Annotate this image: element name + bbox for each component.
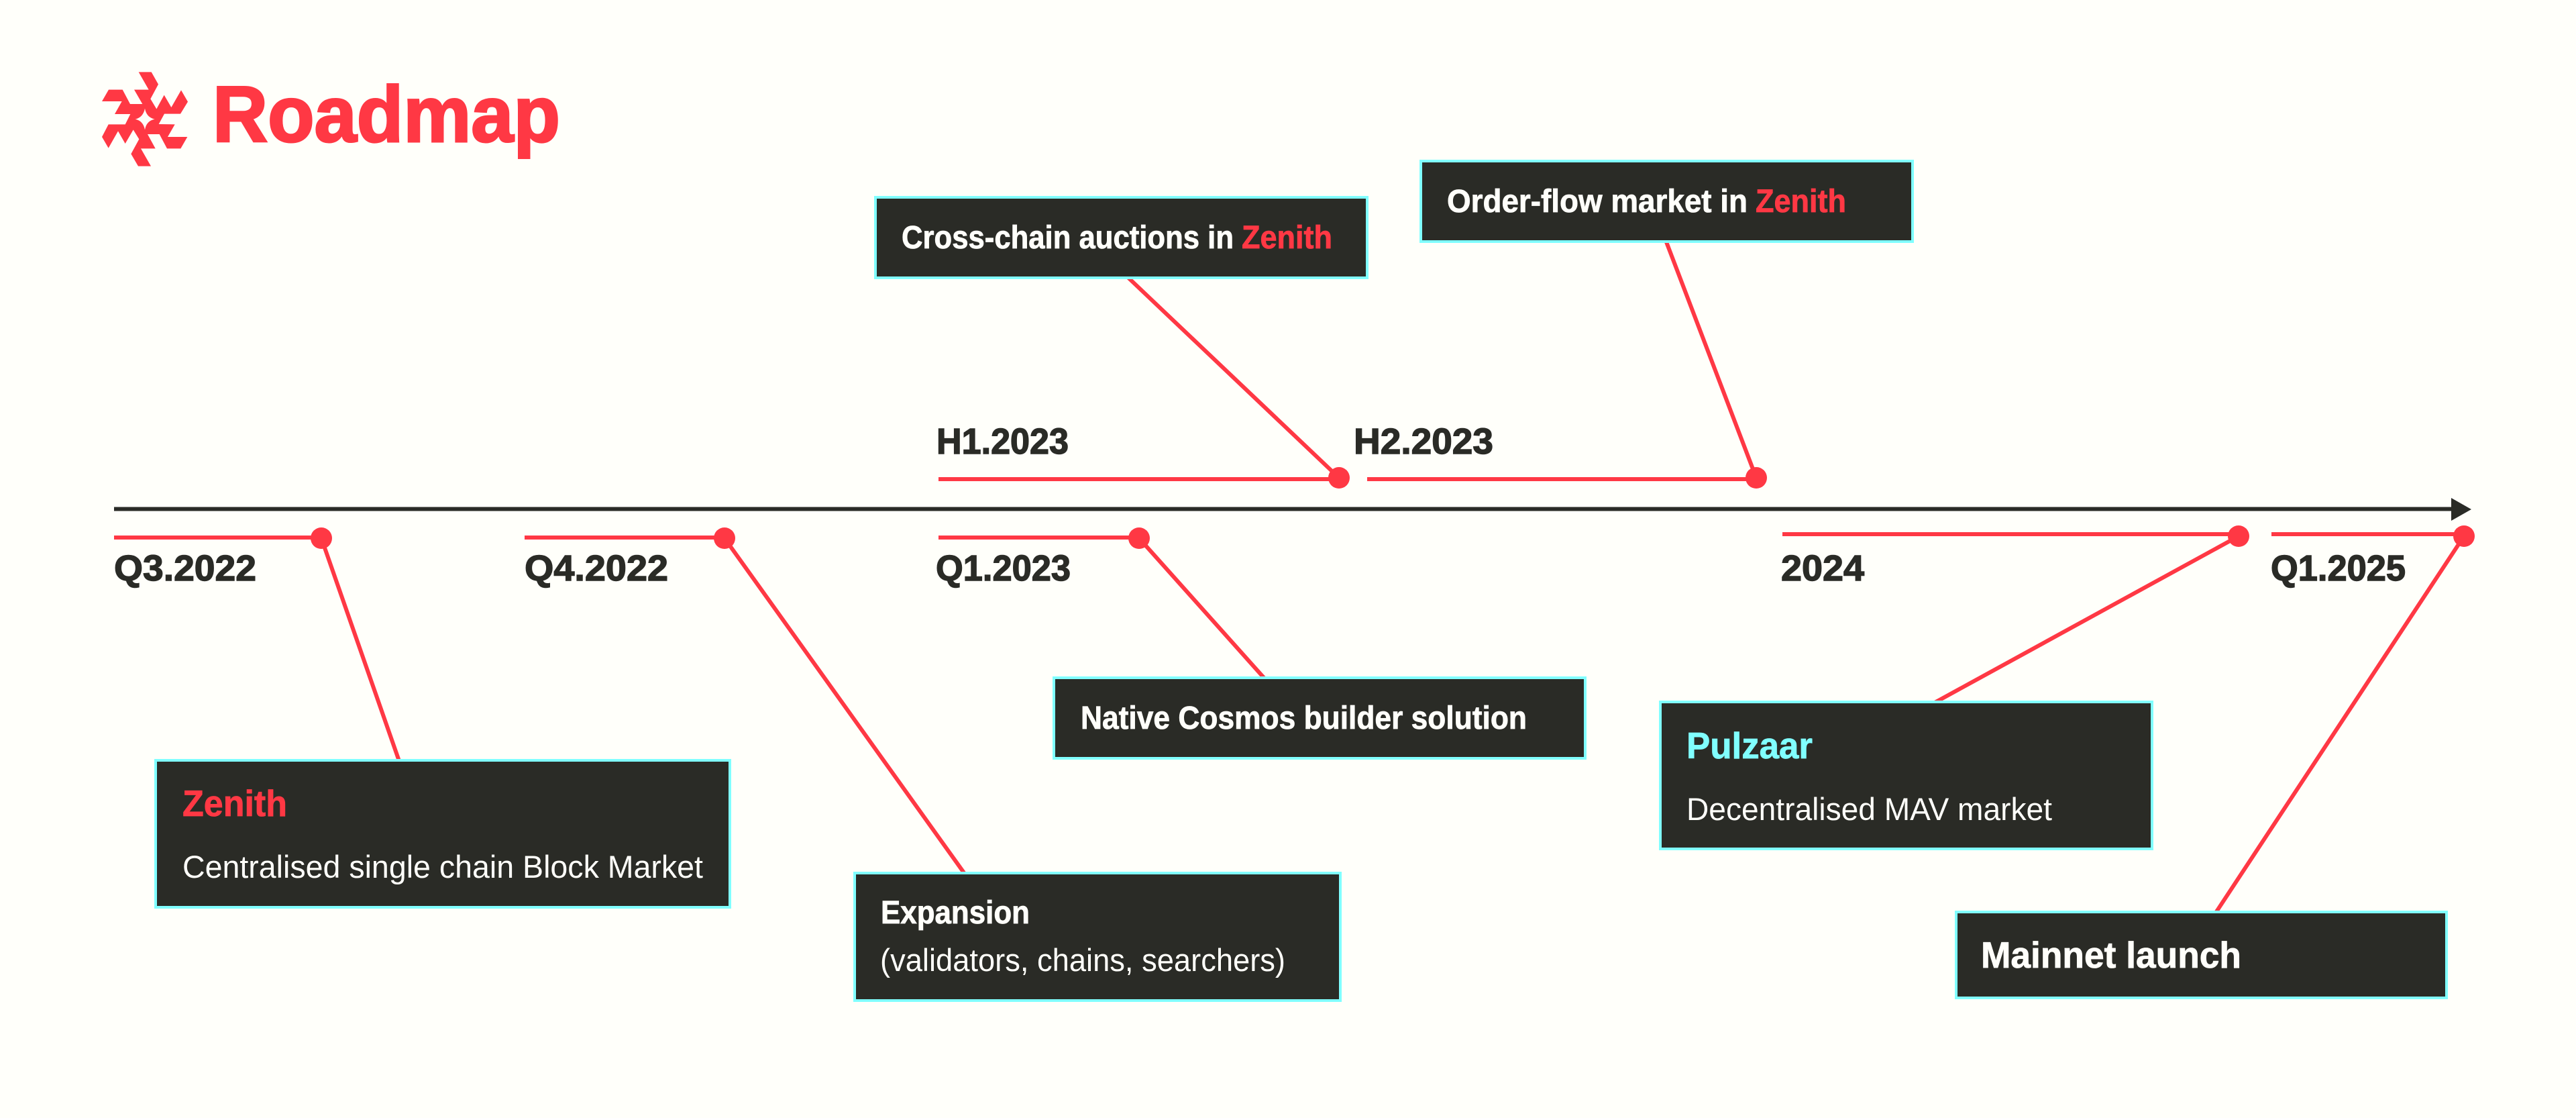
text: validators, chains, searchers: (validators, chains, searchers) — [880, 942, 1285, 978]
heading: Pulzaar: Pulzaar — [1686, 725, 1813, 766]
connector: 2024 to Pulzaar — [1935, 536, 2239, 703]
text: Decentralised MAV market: Decentralised MAV market — [1686, 791, 2052, 827]
milestone: H1.2023 — [936, 421, 1350, 489]
panel: Cross-chain auctions in Zenith: Cross-chain auctions in — [902, 220, 1234, 256]
panel: Cross-chain auctions in Zenith: Zenith — [1242, 220, 1332, 256]
milestone: Q1.2025 — [2271, 525, 2475, 589]
panel: Cross-chain auctions in Zenith — [875, 197, 1367, 278]
milestone: Q3.2022 — [114, 527, 332, 589]
heading: Zenith: Zenith — [182, 782, 287, 824]
connector: Q4.2022 to Expansion — [724, 538, 965, 874]
panel: Native Cosmos builder solution: Native Cosmos builder solution — [1081, 701, 1527, 736]
milestone: Q3.2022: Q3.2022 — [114, 548, 256, 589]
panel: Mainnet launch: Mainnet launch — [1981, 934, 2241, 976]
panel: Order-flow market in Zenith: Zenith — [1756, 184, 1846, 219]
panel: Expansion — [855, 873, 1340, 1001]
panel: Native Cosmos builder solution — [1054, 678, 1585, 758]
panel: Pulzaar — [1660, 702, 2152, 849]
icon: snowflake logo — [102, 72, 188, 166]
milestone: 2024 — [1781, 525, 2249, 589]
timeline axis arrow — [114, 498, 2471, 521]
title: Roadmap — [213, 70, 560, 159]
milestone: Q1.2023: Q1.2023 — [936, 548, 1071, 589]
milestone: Q4.2022 — [525, 527, 735, 589]
connector: Q3.2022 to Zenith — [321, 538, 399, 761]
connector: H1.2023 to Cross-chain auctions — [1127, 276, 1339, 478]
connector: H2.2023 to Order-flow market — [1666, 240, 1756, 478]
panel: Order-flow market in Zenith: Order-flow market in — [1447, 184, 1748, 219]
connector: Q1.2023 to Native Cosmos — [1139, 538, 1265, 678]
milestone: H2.2023 — [1354, 421, 1767, 489]
milestone: Q4.2022: Q4.2022 — [525, 548, 668, 589]
header: logo and title — [102, 70, 560, 166]
milestone: H2.2023: H2.2023 — [1354, 421, 1493, 462]
panel: Mainnet launch — [1956, 912, 2447, 998]
text: Centralised single chain Block Market: Centralised single chain Block Market — [182, 849, 703, 884]
panel: Order-flow market in Zenith — [1421, 161, 1913, 242]
milestone: H1.2023: H1.2023 — [936, 421, 1069, 462]
panel: Zenith — [156, 760, 730, 907]
heading: Expansion: Expansion — [881, 895, 1030, 931]
milestone: 2024: 2024 — [1781, 548, 1864, 589]
connector: Q1.2025 to Mainnet launch — [2216, 536, 2464, 913]
milestone: Q1.2025: Q1.2025 — [2271, 548, 2406, 589]
milestone: Q1.2023 — [936, 527, 1150, 589]
